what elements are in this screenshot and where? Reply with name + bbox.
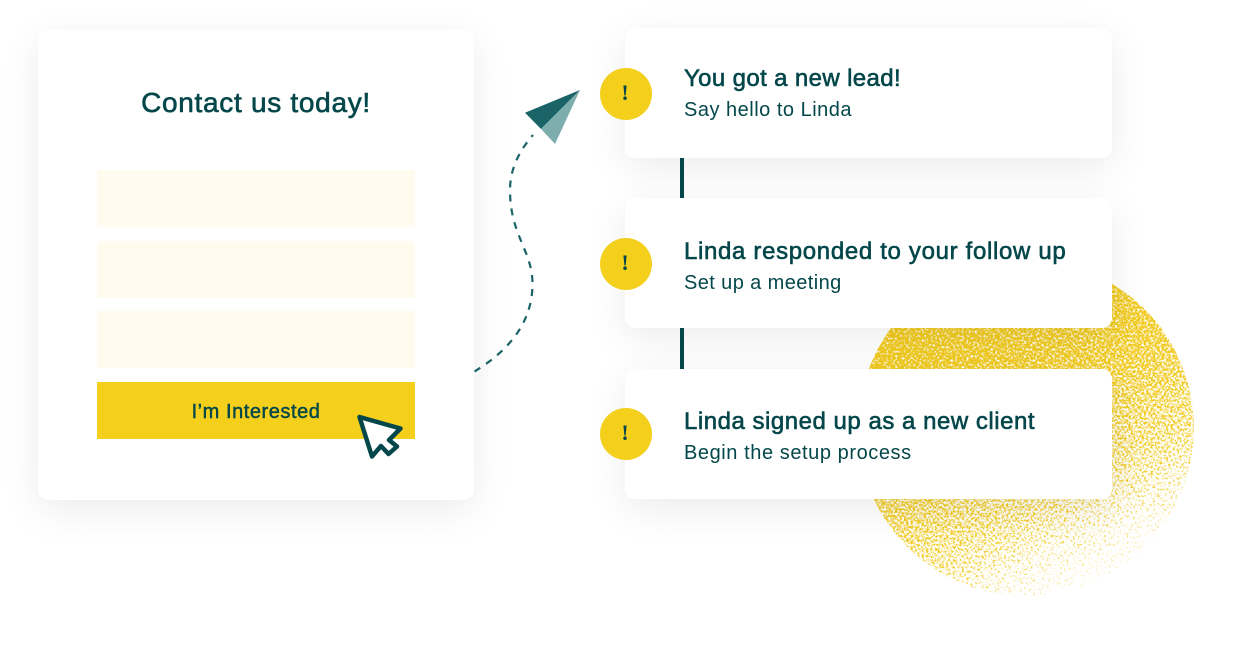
text: new client subtitle: Begin the setup process [684,442,912,464]
button: I'm Interested [97,382,415,439]
icon: alert badge 1 [600,68,652,120]
button: I'm Interested: I’m Interested [192,401,320,423]
text: new client title: Linda signed up as a new client [684,408,1035,435]
panel: contact form [38,30,474,500]
arrow: dashed flight path [474,134,534,372]
text: follow up title: Linda responded to your follow up [684,238,1066,265]
icon: alert badge 1: ! [621,80,629,105]
icon: alert badge 2 [600,238,652,290]
icon: alert badge 3 [600,408,652,460]
panel: notification new client [625,369,1112,499]
text: new lead subtitle: Say hello to Linda [684,99,852,121]
icon: alert badge 3: ! [621,420,629,445]
icon: grainy yellow circle [869,284,1194,596]
heading: contact us today: Contact us today! [141,87,371,118]
form field 3 [97,311,415,368]
form field 2 [97,241,415,298]
connector line 1 [680,158,684,198]
text: new lead title: You got a new lead! [684,65,901,92]
panel: notification follow up [625,198,1112,328]
icon: cursor arrow [357,414,403,459]
text: follow up subtitle: Set up a meeting [684,272,842,294]
panel: notification new lead [625,28,1112,158]
icon: alert badge 2: ! [621,250,629,275]
connector line 2 [680,328,684,369]
form field 1 [97,170,415,227]
icon: paper plane [525,90,580,144]
